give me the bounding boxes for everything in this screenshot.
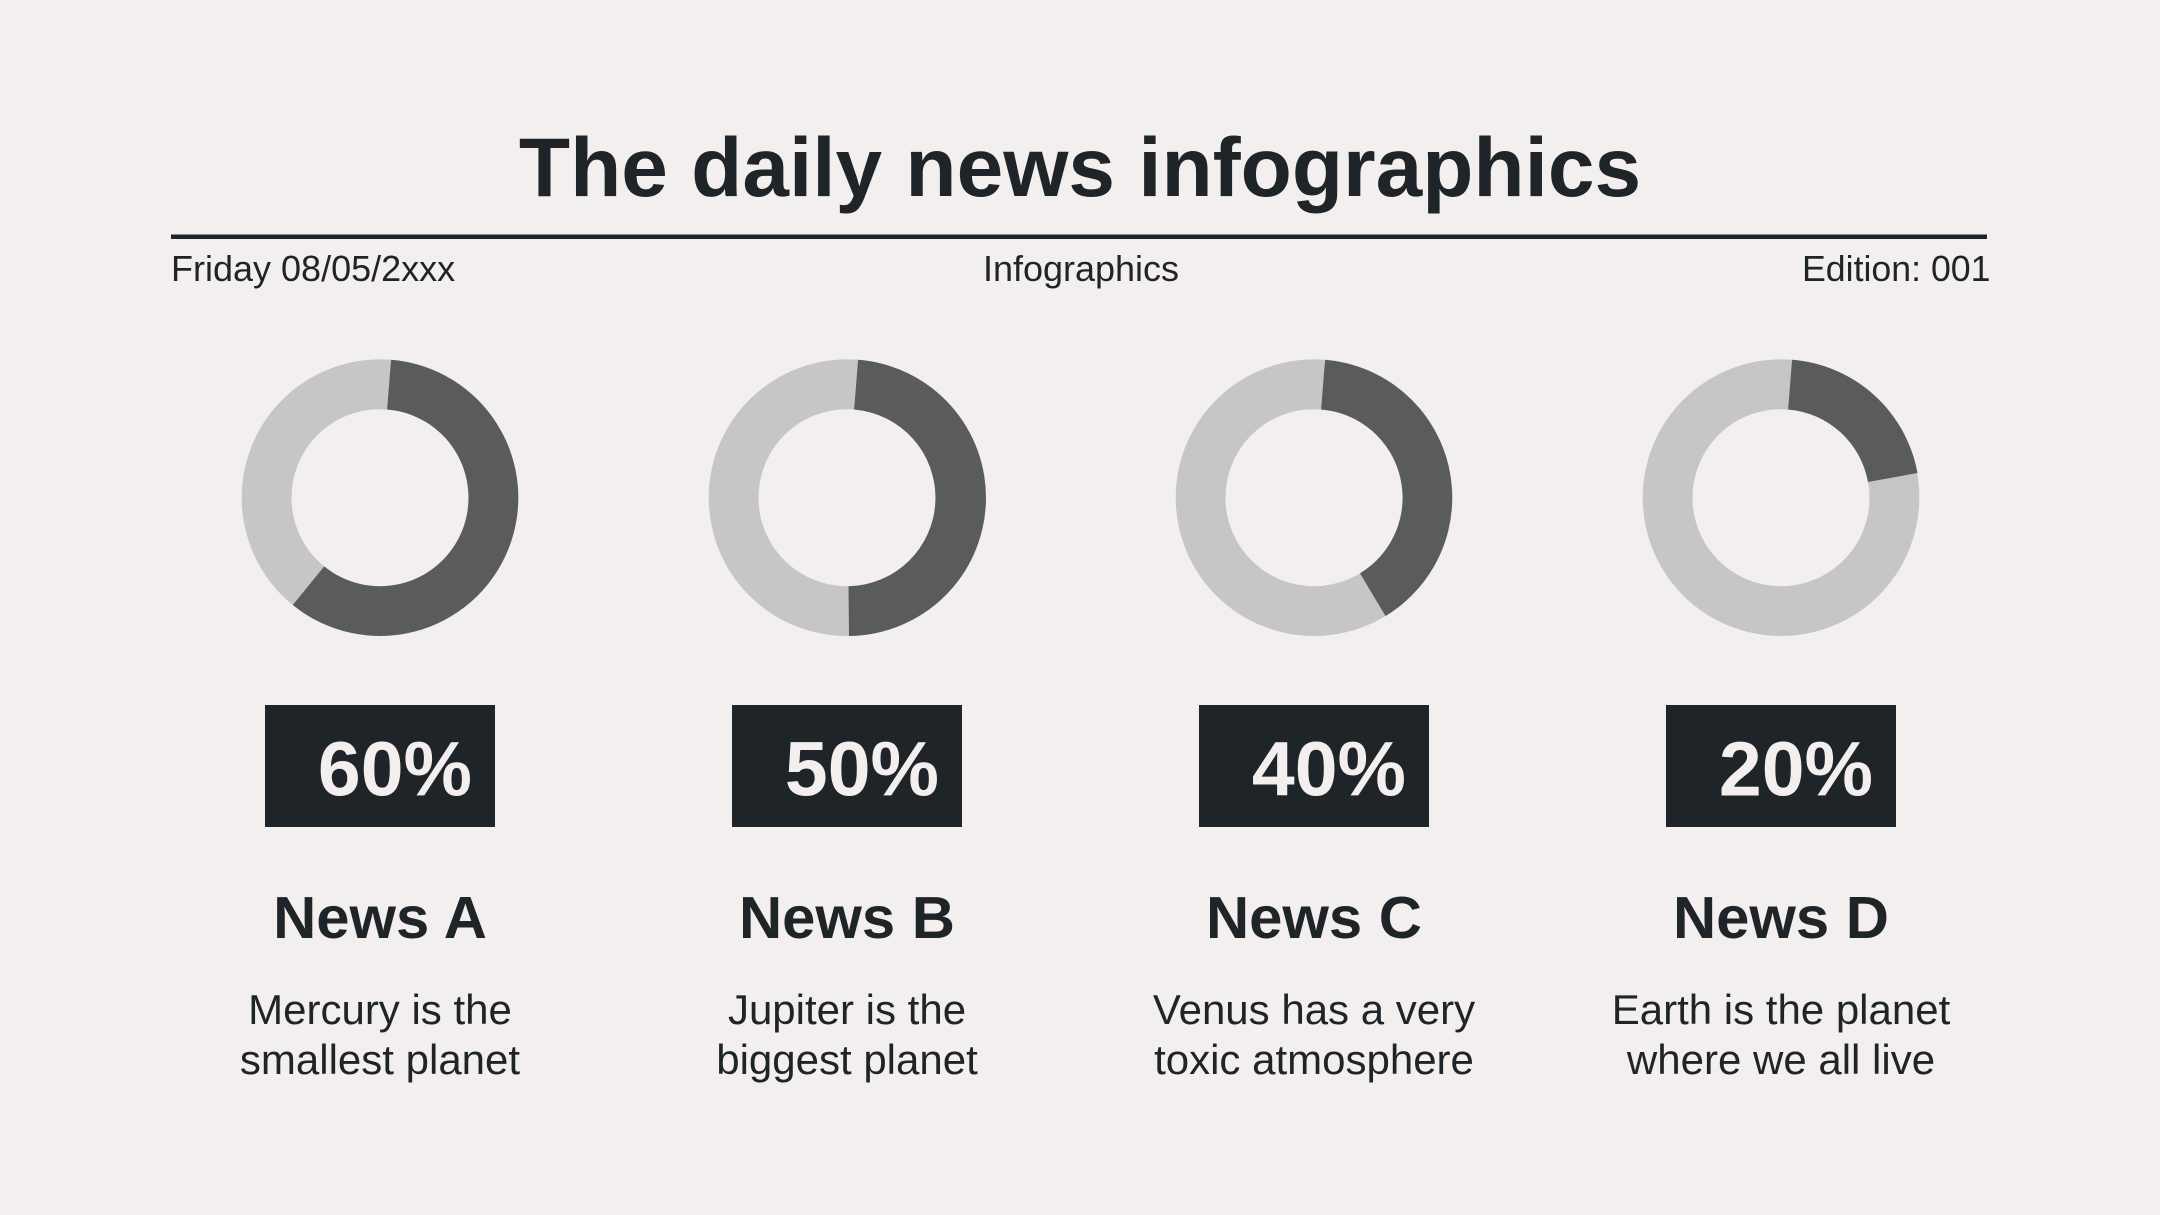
- description: Mercury is the: [248, 986, 512, 1033]
- percentage badge: 40%: [1252, 726, 1406, 812]
- donut chart: 20%: [1668, 360, 1918, 611]
- percentage badge: [1199, 705, 1429, 827]
- section label: Infographics: [983, 248, 1179, 289]
- percentage badge: [1666, 705, 1896, 827]
- heading: News D: [1673, 884, 1889, 951]
- header rule: [171, 234, 1987, 239]
- donut chart: 40%: [1201, 360, 1452, 616]
- heading: News B: [739, 884, 955, 951]
- panel: News C: [1153, 360, 1475, 1083]
- date: Friday 08/05/2xxx: [171, 248, 455, 289]
- donut chart: 50%: [734, 360, 986, 636]
- percentage badge: 50%: [785, 726, 939, 812]
- heading: News A: [273, 884, 487, 951]
- title: The daily news infographics: [519, 120, 1641, 214]
- description: Earth is the planet: [1612, 986, 1951, 1033]
- description: where we all live: [1626, 1036, 1935, 1083]
- percentage badge: 20%: [1719, 726, 1873, 812]
- description: toxic atmosphere: [1154, 1036, 1474, 1083]
- percentage badge: [732, 705, 962, 827]
- percentage badge: 60%: [318, 726, 472, 812]
- panel: News B: [716, 360, 986, 1083]
- description: smallest planet: [240, 1036, 520, 1083]
- description: biggest planet: [716, 1036, 978, 1083]
- panel: News A: [240, 360, 520, 1083]
- donut chart: 60%: [267, 360, 518, 636]
- percentage badge: [265, 705, 495, 827]
- description: Venus has a very: [1153, 986, 1475, 1033]
- panel: News D: [1612, 360, 1951, 1083]
- edition: Edition: 001: [1802, 249, 1990, 289]
- heading: News C: [1206, 884, 1422, 951]
- description: Jupiter is the: [728, 986, 966, 1033]
